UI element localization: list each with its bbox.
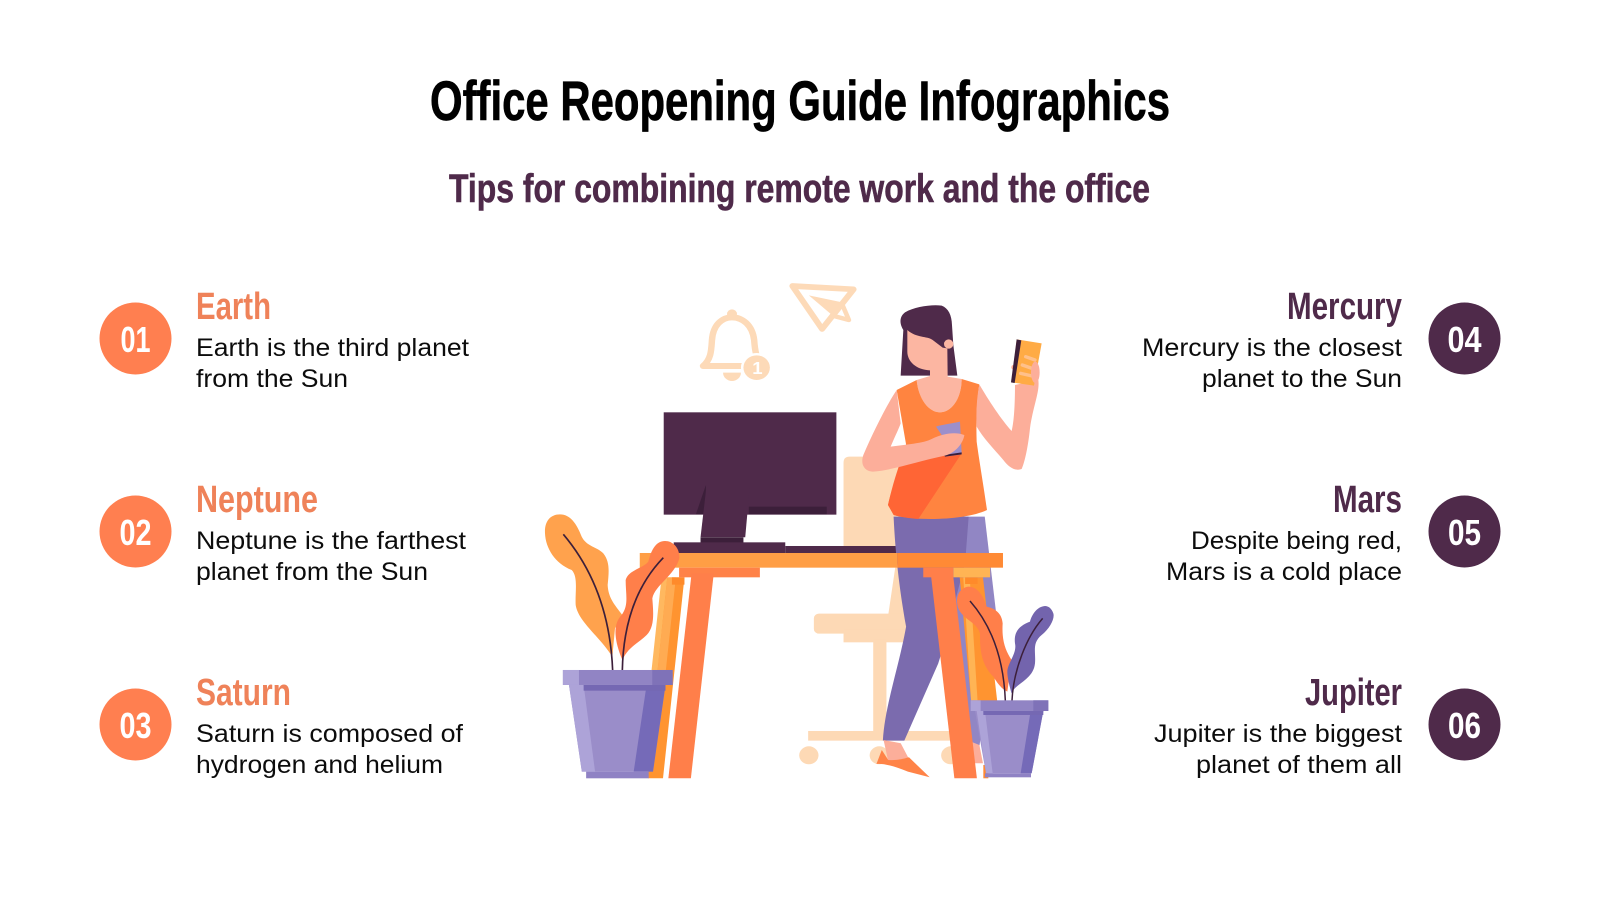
desk bbox=[640, 553, 1003, 778]
item 02: Neptune: Neptune bbox=[196, 479, 318, 521]
item 03: Saturn: Saturn bbox=[196, 672, 291, 714]
computer monitor bbox=[664, 412, 836, 537]
item 01: Earth: Earth bbox=[196, 286, 271, 328]
item 01: Earth: 01 bbox=[120, 319, 150, 360]
item 04: Mercury: Mercury is the closest bbox=[1142, 334, 1402, 362]
item 03: Saturn: 03 bbox=[120, 705, 152, 746]
item 01: Earth bbox=[100, 286, 469, 393]
chair bbox=[799, 457, 960, 764]
item 04: Mercury: Mercury bbox=[1287, 286, 1402, 328]
item 03: Saturn: hydrogen and helium bbox=[196, 751, 443, 779]
keyboard and monitor base bbox=[674, 537, 901, 553]
right plant and pot bbox=[957, 587, 1054, 777]
item 04: Mercury: planet to the Sun bbox=[1202, 365, 1402, 393]
item 06: Jupiter: 06 bbox=[1448, 705, 1481, 746]
subtitle: Tips for combining remote work and the office bbox=[449, 167, 1150, 211]
item 05: Mars bbox=[1166, 479, 1500, 586]
item 06: Jupiter: Jupiter is the biggest bbox=[1154, 720, 1402, 748]
title: Office Reopening Guide Infographics bbox=[430, 69, 1170, 132]
item 05: Mars: Mars bbox=[1333, 479, 1402, 521]
item 01: Earth: Earth is the third planet bbox=[196, 334, 469, 362]
person legs bbox=[876, 517, 997, 777]
left plant leaves bbox=[545, 514, 679, 671]
item 03: Saturn bbox=[100, 672, 463, 779]
item 02: Neptune: 02 bbox=[120, 512, 152, 553]
icon: paper plane bbox=[792, 286, 854, 329]
icon: notification bell bbox=[703, 309, 772, 382]
item 05: Mars: Mars is a cold place bbox=[1166, 558, 1402, 586]
item 04: Mercury: 04 bbox=[1448, 319, 1482, 360]
item 02: Neptune bbox=[100, 479, 466, 586]
left plant pot bbox=[563, 670, 673, 778]
item 02: Neptune: Neptune is the farthest bbox=[196, 527, 466, 555]
item 02: Neptune: planet from the Sun bbox=[196, 558, 428, 586]
icon: notification bell: 1 bbox=[752, 359, 763, 378]
item 05: Mars: 05 bbox=[1448, 512, 1481, 553]
item 01: Earth: from the Sun bbox=[196, 365, 348, 393]
item 03: Saturn: Saturn is composed of bbox=[196, 720, 463, 748]
illustration: woman at standing desk bbox=[545, 286, 1054, 778]
item 06: Jupiter: planet of them all bbox=[1196, 751, 1402, 779]
item 05: Mars: Despite being red, bbox=[1191, 527, 1402, 555]
item 06: Jupiter bbox=[1154, 672, 1500, 779]
person upper body bbox=[862, 305, 1042, 519]
item 06: Jupiter: Jupiter bbox=[1305, 672, 1402, 714]
item 04: Mercury bbox=[1142, 286, 1500, 393]
